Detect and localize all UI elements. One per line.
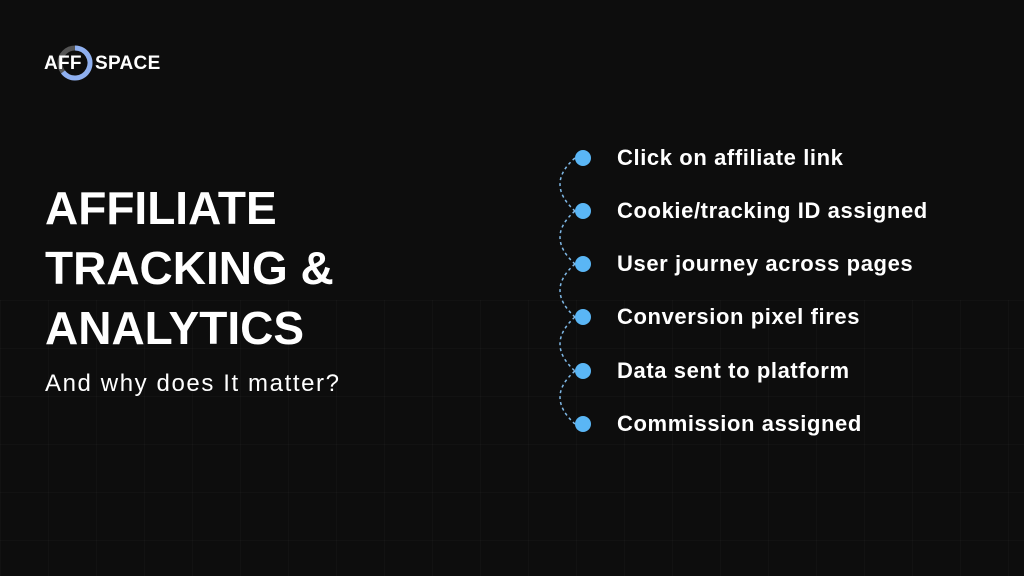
steps list: Data sent to platform [617,358,850,383]
title: AFFILIATE [45,182,277,234]
steps list: Commission assigned [617,411,862,436]
steps list: Cookie/tracking ID assigned [617,198,928,223]
title: TRACKING & [45,242,334,294]
steps list: User journey across pages [617,251,913,276]
title: ANALYTICS [45,302,304,354]
logo [44,46,161,80]
steps list: Conversion pixel fires [617,304,860,329]
steps list: Click on affiliate link [617,145,844,170]
logo: SPACE [95,53,161,74]
subtitle: And why does It matter? [45,370,341,397]
steps list [617,145,928,436]
logo: AFF [44,53,82,74]
title [45,182,334,354]
